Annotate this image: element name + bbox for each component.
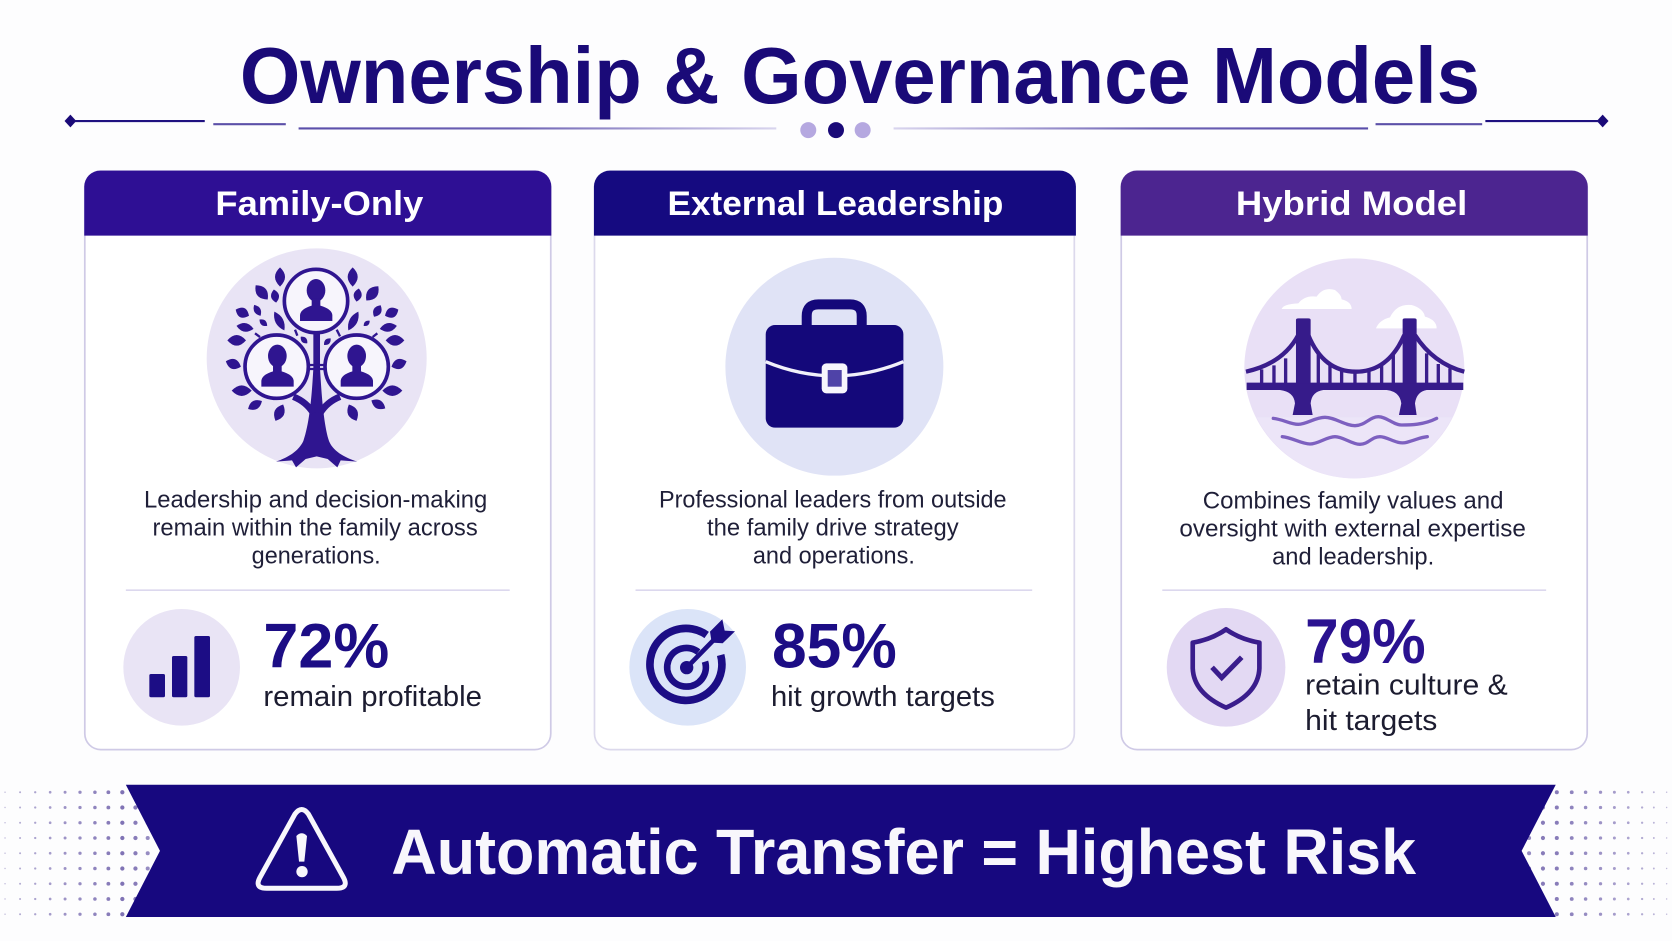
description: external leadership: Professional leaders from outside	[659, 487, 1007, 514]
stat: 79%: hit targets	[1305, 705, 1437, 737]
title divider	[65, 115, 1609, 138]
header: hybrid model: Hybrid Model	[1236, 185, 1467, 223]
stat: 85%	[771, 611, 995, 713]
panel: external leadership	[594, 171, 1076, 750]
header: family-only: Family-Only	[215, 185, 423, 223]
dot pattern: left	[5, 792, 148, 917]
icon: shield	[1167, 608, 1285, 727]
description: family-only: remain within the family across	[153, 514, 478, 541]
header: hybrid model	[1121, 171, 1588, 236]
description: family-only: generations.	[252, 543, 381, 570]
description: family-only	[144, 487, 487, 570]
stat: 72%: 72%	[263, 611, 389, 681]
dot pattern: right	[1529, 792, 1667, 917]
icon: bar chart	[123, 609, 240, 726]
stat: 79%	[1305, 607, 1508, 737]
icon: target	[629, 609, 746, 726]
stat: 79%: retain culture &	[1305, 670, 1508, 702]
description: hybrid model: oversight with external expertise	[1179, 515, 1526, 542]
title: Ownership & Governance Models	[240, 31, 1480, 120]
header: external leadership: External Leadership	[668, 185, 1003, 223]
stat: 72%: remain profitable	[263, 681, 482, 713]
stat: 79%: 79%	[1305, 607, 1426, 677]
stat: 85%: 85%	[772, 611, 897, 681]
icon: briefcase	[725, 258, 943, 476]
stat: 72%	[263, 611, 482, 713]
description: family-only: Leadership and decision-making	[144, 487, 487, 514]
description: hybrid model: Combines family values and	[1203, 488, 1503, 515]
description: external leadership: the family drive strategy	[707, 514, 959, 541]
description: hybrid model	[1179, 488, 1526, 571]
stat: 85%: hit growth targets	[771, 681, 995, 713]
icon: bridge	[1244, 258, 1464, 478]
description: external leadership: and operations.	[753, 543, 915, 570]
banner text: Automatic Transfer = Highest Risk	[391, 816, 1416, 888]
panel: hybrid model	[1121, 171, 1588, 750]
description: hybrid model: and leadership.	[1272, 544, 1434, 571]
description: external leadership	[659, 487, 1007, 570]
banner	[126, 785, 1556, 917]
icon: family tree	[207, 248, 427, 468]
header: family-only	[84, 171, 551, 236]
icon: warning triangle	[258, 809, 345, 888]
panel: family-only	[84, 171, 551, 750]
header: external leadership	[594, 171, 1076, 236]
